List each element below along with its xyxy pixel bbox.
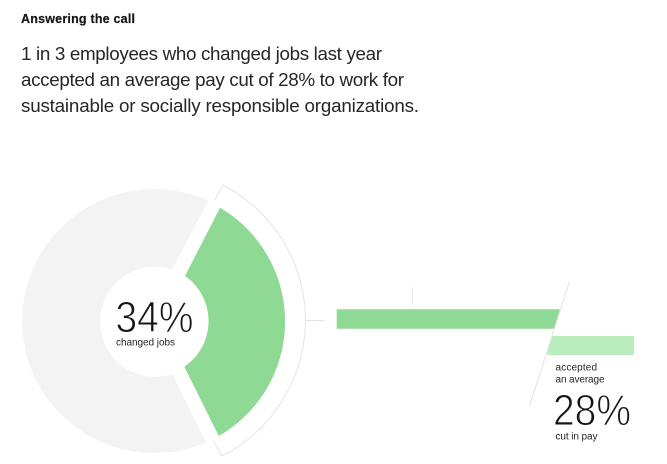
intro text block (21, 43, 419, 116)
pay cut labels (553, 362, 631, 442)
intro text block: accepted an average pay cut of 28% to work for (21, 69, 404, 90)
label: accepted an average: accepted (556, 362, 597, 374)
donut chart (22, 185, 305, 456)
donut remainder segment (22, 189, 208, 453)
bar chart: pay cut (337, 282, 634, 407)
intro text block: 1 in 3 employees who changed jobs last year (21, 43, 382, 64)
diagonal divider (529, 282, 569, 407)
center value: 34%: 34% (116, 293, 194, 342)
label: accepted an average (556, 362, 605, 386)
donut highlighted segment: 34% (184, 208, 285, 436)
connector line (305, 320, 325, 322)
value: 28%: 28% (553, 386, 631, 435)
label: accepted an average: an average (556, 374, 605, 386)
full pay bar (337, 309, 560, 329)
intro text block: sustainable or socially responsible organizations. (21, 95, 419, 116)
pay cut bar (547, 336, 634, 355)
center label: changed jobs (116, 338, 175, 348)
label: cut in pay: cut in pay (556, 432, 598, 442)
heading: Answering the call (21, 12, 135, 26)
tick mark (412, 287, 414, 305)
outline bracket arc (213, 185, 305, 456)
